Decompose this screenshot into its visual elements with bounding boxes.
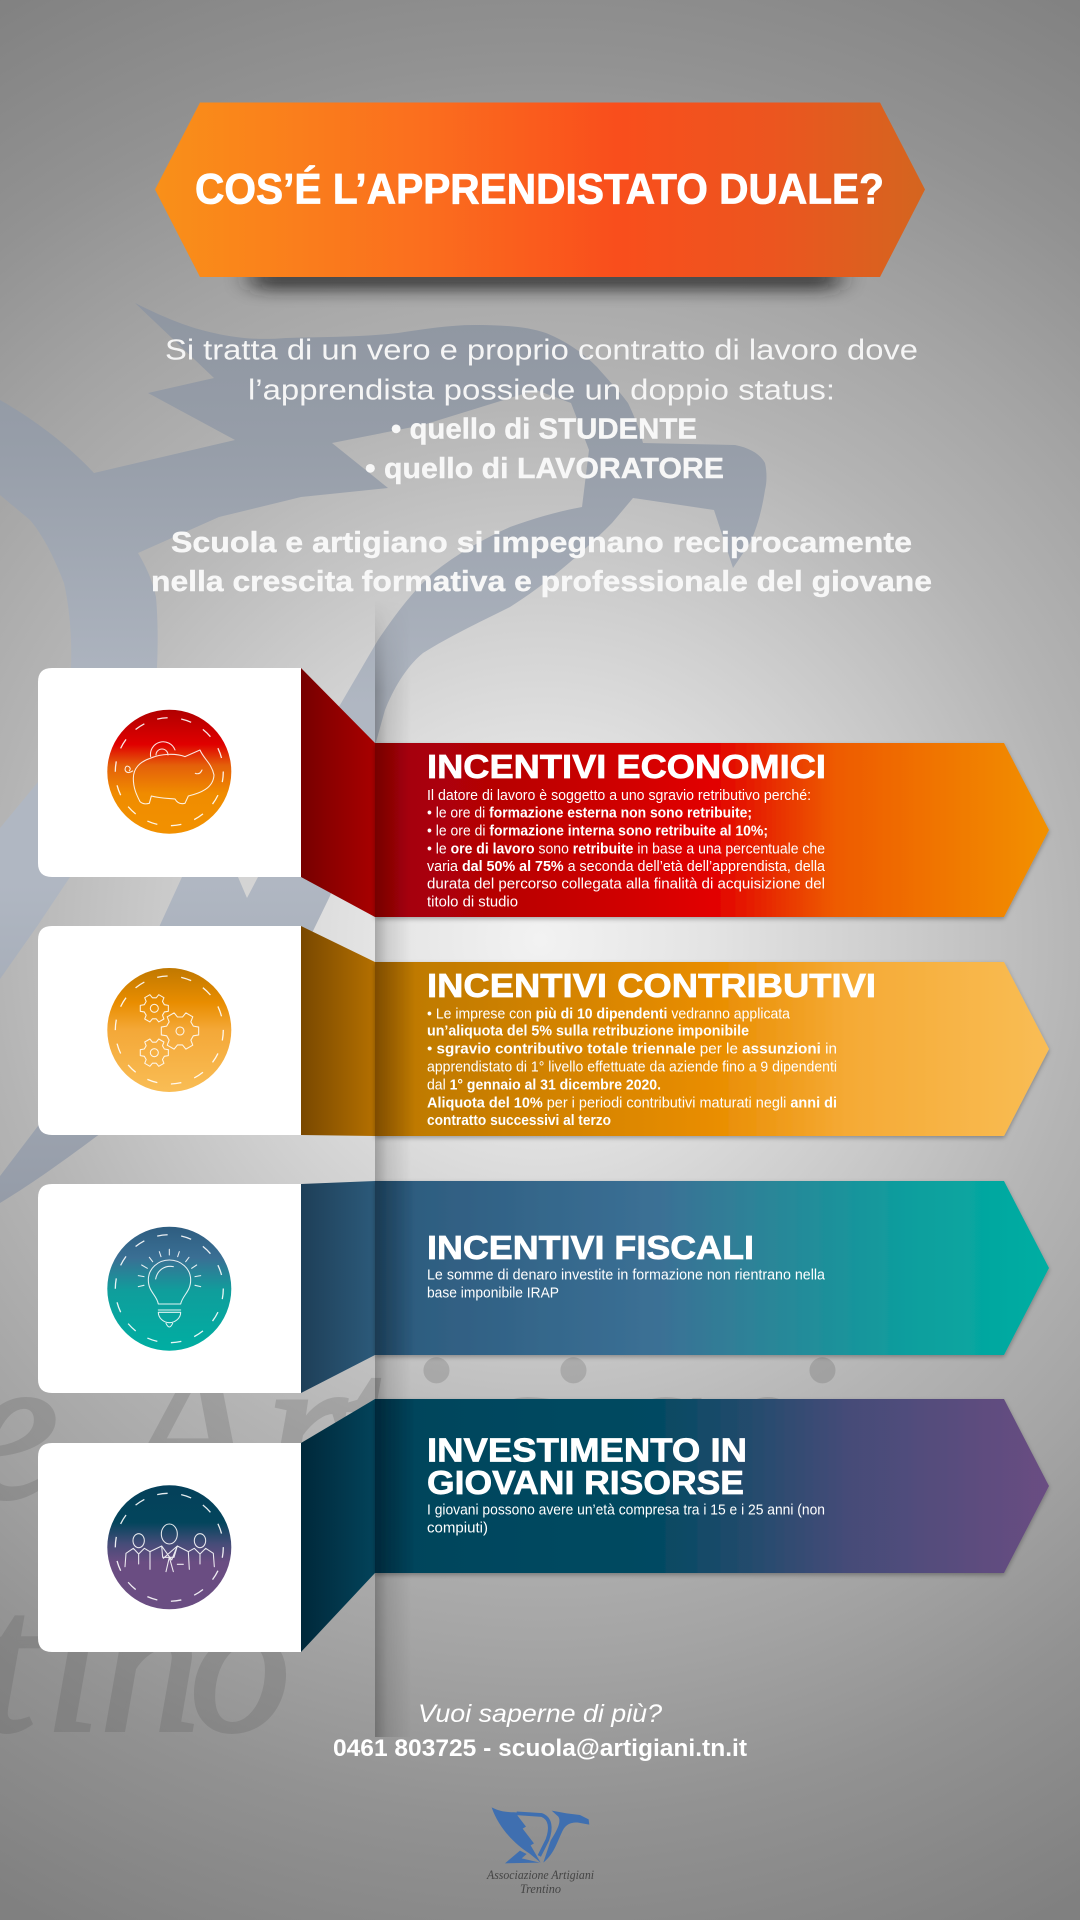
body text: contratto successivi al terzo <box>427 1113 611 1129</box>
body text: • le ore di lavoro sono retribuite in base a una percentuale che <box>427 841 825 857</box>
body text: titolo di studio <box>427 895 518 911</box>
intro text block <box>151 334 932 598</box>
fold <box>301 668 375 917</box>
heading: INCENTIVI ECONOMICI <box>427 748 826 785</box>
intro text block: nella crescita formativa e professionale del giovane <box>151 566 932 598</box>
body text: compiuti) <box>427 1520 488 1536</box>
icon: gears <box>107 968 231 1092</box>
card <box>38 926 301 1135</box>
watermark: text Artigiani: r <box>265 1312 347 1542</box>
logo: association name: Trentino <box>520 1882 561 1896</box>
body text: varia dal 50% al 75% a seconda dell’età dell’apprendista, della <box>427 859 826 875</box>
intro text block: l’apprendista possiede un doppio status: <box>248 374 835 406</box>
panel: incentivi fiscali <box>38 1181 1049 1393</box>
body text <box>427 1502 825 1536</box>
logo: association name: Associazione Artigiani <box>486 1868 594 1882</box>
body text: dal 1° gennaio al 31 dicembre 2020. <box>427 1077 661 1093</box>
intro text block: • quello di STUDENTE <box>391 414 697 446</box>
body text: I giovani possono avere un’età compresa tra i 15 e i 25 anni (non <box>427 1502 825 1518</box>
heading <box>427 1432 747 1501</box>
contact callout: Vuoi saperne di più? <box>418 1700 662 1728</box>
card <box>38 1443 301 1652</box>
panel: incentivi economici <box>38 668 1049 917</box>
watermark: text Artigiani: a <box>603 1312 707 1542</box>
fold <box>301 1181 375 1393</box>
intro text block: Si tratta di un vero e proprio contratto di lavoro dove <box>165 334 918 366</box>
watermark: text Artigiani: g <box>463 1312 567 1542</box>
heading: INVESTIMENTO IN <box>427 1432 747 1469</box>
body text: • sgravio contributivo totale triennale per le assunzioni in <box>427 1042 837 1058</box>
body text: • le ore di formazione interna sono retribuite al 10%; <box>427 823 768 839</box>
icon: light bulb <box>107 1227 231 1351</box>
title banner: COS’É L’APPRENDISTATO DUALE? <box>195 166 884 214</box>
body text: un’aliquota del 5% sulla retribuzione imponibile <box>427 1024 749 1040</box>
card <box>38 1184 301 1393</box>
watermark: text Artigiani: t <box>335 1312 397 1542</box>
body text: Il datore di lavoro è soggetto a uno sgravio retributivo perché: <box>427 788 811 804</box>
body text: • Le imprese con più di 10 dipendenti vedranno applicata <box>427 1006 791 1022</box>
heading: INCENTIVI FISCALI <box>427 1229 754 1266</box>
logo: eagle <box>492 1807 589 1863</box>
icon: piggy bank <box>107 710 231 834</box>
body text: • le ore di formazione esterna non sono retribuite; <box>427 806 752 822</box>
fold <box>301 1399 375 1652</box>
watermark: text Trentino: o <box>190 1553 290 1774</box>
fold <box>301 926 375 1136</box>
arrow band <box>375 962 1049 1136</box>
panel: incentivi contributivi <box>38 926 1049 1136</box>
watermark: text Artigiani: n <box>695 1312 799 1542</box>
light notch between cards <box>238 877 258 898</box>
body text <box>427 788 826 911</box>
body text: Le somme di denaro investite in formazione non rientrano nella <box>427 1268 826 1284</box>
arrow band <box>375 1399 1049 1573</box>
watermark: text Artigiani: A <box>113 1312 253 1542</box>
heading: INCENTIVI CONTRIBUTIVI <box>427 967 876 1004</box>
central vertical shadow strip <box>375 615 403 1737</box>
watermark: eagle <box>0 303 766 1203</box>
watermark: text Artigiani: i <box>396 1312 454 1542</box>
panel: investimento in giovani risorse <box>38 1399 1049 1652</box>
body text <box>427 1006 837 1129</box>
card <box>38 668 301 877</box>
body text: apprendistato di 1° livello effettuate da aziende fino a 9 dipendenti <box>427 1060 837 1076</box>
watermark: text Artigiani: i <box>533 1312 591 1542</box>
body text: durata del percorso collegata alla finalità di acquisizione del <box>427 877 825 893</box>
logo: association name <box>486 1868 594 1896</box>
icon: people <box>107 1485 231 1609</box>
title banner <box>155 102 925 290</box>
watermark: text Trentino: i <box>45 1553 101 1774</box>
heading: GIOVANI RISORSE <box>427 1464 744 1501</box>
arrow band <box>375 1181 1049 1355</box>
contact callout <box>333 1700 747 1762</box>
body text <box>427 1268 826 1301</box>
watermark: text Artigiani: i <box>782 1312 840 1542</box>
watermark: text Trentino: n <box>100 1553 200 1774</box>
body text: Aliquota del 10% per i periodi contributivi maturati negli anni di <box>427 1095 837 1111</box>
intro text block: Scuola e artigiano si impegnano reciprocamente <box>171 527 912 559</box>
intro text block: • quello di LAVORATORE <box>365 453 724 485</box>
arrow band <box>375 743 1049 917</box>
body text: base imponibile IRAP <box>427 1285 559 1301</box>
contact callout: 0461 803725 - scuola@artigiani.tn.it <box>333 1735 747 1762</box>
